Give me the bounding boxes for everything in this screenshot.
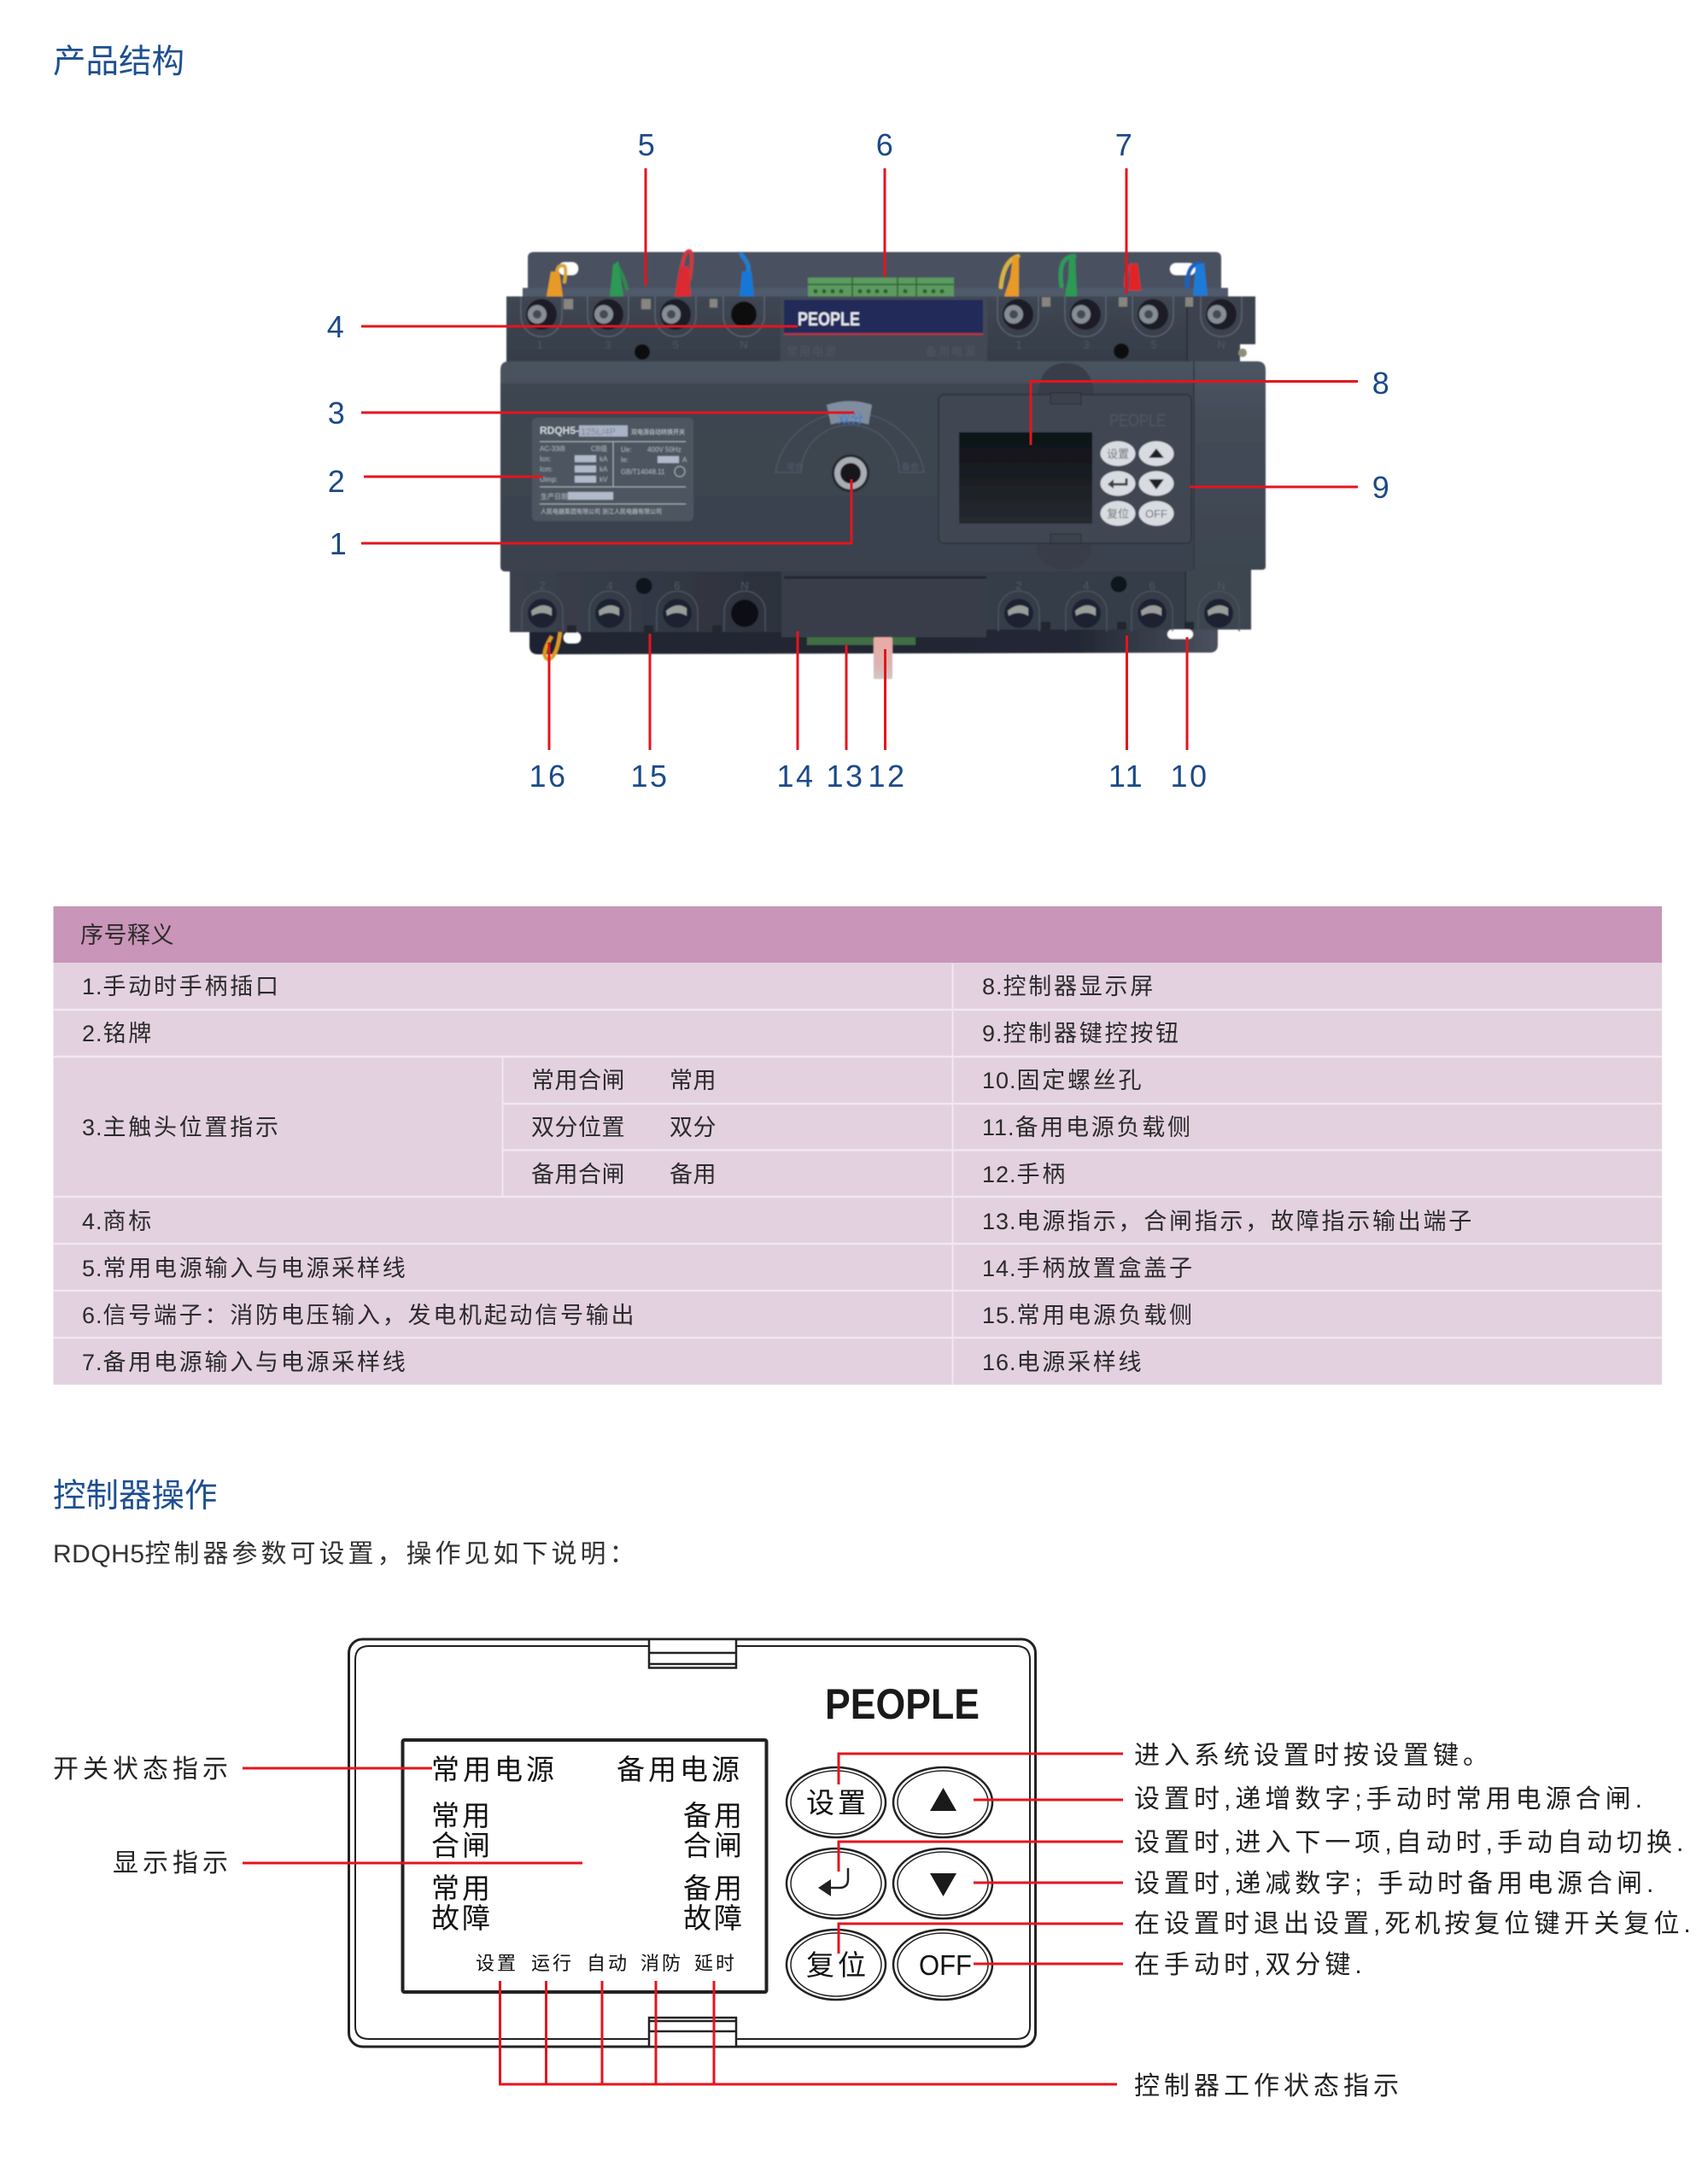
controller domes — [1036, 363, 1094, 570]
table body — [53, 963, 1662, 1385]
top terminal labels: 5 — [672, 338, 679, 351]
callout numbers: 3 — [328, 395, 347, 431]
left column: 3.主触头位置指示 — [82, 1115, 281, 1140]
bottom terminal labels: 6 — [674, 579, 681, 592]
button labels and icons: 设置 — [806, 1787, 869, 1819]
right column: 13.电源指示，合闸指示，故障指示输出端子 — [982, 1209, 1474, 1234]
nameplate: RDQH5- — [540, 425, 579, 437]
top terminal block centre — [781, 296, 987, 365]
top mounting plate — [528, 252, 1221, 296]
controller diagram — [348, 1639, 1035, 2047]
left column: 双分位置 — [531, 1115, 625, 1140]
nameplate: AC-33iB — [540, 445, 565, 453]
bottom terminal labels: 4 — [606, 579, 613, 592]
top terminal labels: 3 — [605, 338, 611, 351]
status labels: 设置 — [476, 1953, 518, 1974]
status labels: 消防 — [640, 1953, 683, 1974]
right annotations: 进入系统设置时按设置键。 — [1134, 1742, 1493, 1770]
position indicator arc: 常合 — [787, 461, 804, 472]
nameplate: Icn: — [540, 455, 551, 463]
right side module — [1192, 361, 1266, 570]
display labels: 合闸 — [431, 1830, 493, 1861]
display labels: 常用电源 — [431, 1754, 558, 1785]
nameplate: A — [682, 456, 687, 464]
holes in top block — [635, 343, 1129, 360]
bottom wire — [545, 632, 560, 659]
green signal terminals — [808, 278, 954, 296]
nameplate: kA — [600, 455, 608, 463]
mounting holes — [559, 262, 1196, 643]
product photo: switch device — [500, 251, 1266, 679]
top terminal block N — [1187, 296, 1255, 365]
callout numbers: 2 — [328, 464, 347, 499]
top terminals — [521, 296, 1242, 337]
top terminal labels: N — [1217, 338, 1225, 351]
display labels: 故障 — [431, 1902, 493, 1934]
left column: 5.常用电源输入与电源采样线 — [82, 1256, 408, 1281]
top terminal labels: 1 — [536, 338, 543, 351]
controller outline — [348, 1639, 1035, 2047]
wire sleeves top — [547, 256, 1208, 296]
left column: 1.手动时手柄插口 — [82, 974, 281, 999]
logo PEOPLE: PEOPLE — [825, 1680, 980, 1728]
top terminal block right — [987, 296, 1187, 365]
small contacts — [564, 297, 1193, 309]
lid edge — [784, 576, 986, 579]
holes in bottom block — [635, 576, 1127, 595]
callout numbers: 14 — [776, 759, 816, 794]
right annotations: 设置时,递减数字; 手动时备用电源合闸. — [1134, 1870, 1658, 1898]
right annotations: 设置时,进入下一项,自动时,手动自动切换. — [1134, 1829, 1688, 1857]
left column: 7.备用电源输入与电源采样线 — [82, 1350, 408, 1375]
left column: 常用合闸 — [531, 1068, 625, 1093]
button labels and icons: OFF — [919, 1949, 972, 1981]
nameplate: 双电源自动转换开关 — [631, 428, 685, 436]
right column: 12.手柄 — [982, 1162, 1068, 1187]
callout numbers: 5 — [638, 127, 657, 162]
right annotations: 控制器工作状态指示 — [1134, 2072, 1403, 2100]
callout numbers: 16 — [529, 759, 568, 794]
callout numbers: 7 — [1115, 127, 1134, 162]
nameplate: 125L/4P — [581, 427, 616, 437]
display labels: 常用 — [431, 1800, 493, 1831]
top terminal labels: 1 — [1015, 338, 1022, 351]
right column: 15.常用电源负载侧 — [982, 1303, 1195, 1328]
block divider bottom — [1184, 571, 1186, 628]
handle storage lid — [781, 567, 986, 637]
bottom terminal block left — [510, 567, 781, 632]
handle — [874, 637, 892, 679]
display labels — [431, 1754, 745, 1934]
callout numbers: 15 — [630, 759, 670, 794]
bottom terminal labels: 2 — [1015, 579, 1022, 592]
bottom terminal labels: N — [740, 579, 749, 592]
callout numbers: 13 — [826, 759, 865, 794]
nameplate: 生产日期 — [541, 492, 568, 501]
top terminal block left — [506, 296, 781, 365]
table: 序号释义 — [53, 906, 1662, 1385]
display labels: 故障 — [683, 1902, 745, 1934]
controller screen — [959, 432, 1092, 524]
callout numbers: 4 — [327, 309, 346, 344]
right column: 10.固定螺丝孔 — [982, 1068, 1144, 1093]
top clip — [649, 1639, 736, 1667]
display labels: 备用 — [683, 1800, 745, 1831]
bottom terminal labels: N — [1217, 579, 1225, 592]
left column: 常用 — [670, 1068, 717, 1093]
position indicator arc: 双分 — [838, 412, 863, 426]
display labels: 备用电源 — [617, 1754, 743, 1785]
bottom terminal labels: 6 — [1149, 579, 1155, 592]
status labels — [476, 1953, 737, 1974]
callout numbers — [327, 127, 1391, 794]
display labels: 备用 — [683, 1872, 745, 1904]
bottom terminal block N — [1185, 567, 1251, 630]
manual handle socket — [832, 454, 869, 492]
nameplate — [532, 418, 693, 521]
position indicator arc: 备合 — [902, 461, 919, 472]
side screw — [1238, 349, 1247, 357]
nameplate: Uimp: — [540, 476, 558, 483]
right annotations: 在手动时,双分键. — [1134, 1951, 1366, 1979]
callout numbers: 1 — [330, 526, 348, 561]
status labels: 自动 — [587, 1953, 629, 1974]
right annotations: 设置时,递增数字;手动时常用电源合闸. — [1134, 1785, 1647, 1813]
bottom terminal labels: 2 — [539, 579, 546, 592]
position indicator arc — [775, 401, 924, 472]
bottom terminal labels: 4 — [1083, 579, 1090, 592]
brand label PEOPLE — [784, 300, 983, 335]
top plate ledge — [523, 288, 1228, 297]
bottom terminal labels — [539, 579, 1225, 592]
block divider — [1186, 296, 1188, 361]
controller buttons: OFF — [1145, 507, 1167, 520]
right annotations: 在设置时退出设置,死机按复位键开关复位. — [1134, 1910, 1695, 1938]
top terminal labels — [536, 338, 1225, 351]
bottom clip — [649, 2018, 736, 2047]
top terminal labels: 3 — [1083, 338, 1090, 351]
left annotation: 开关状态指示: 开关状态指示 — [53, 1755, 232, 1784]
controller buttons — [1100, 441, 1173, 526]
left column: 备用 — [670, 1162, 717, 1187]
left column: 备用合闸 — [531, 1162, 625, 1187]
status labels: 运行 — [531, 1953, 574, 1974]
left column: 2.铭牌 — [82, 1021, 154, 1046]
nameplate: 400V 50Hz — [647, 446, 681, 454]
top terminal labels: N — [740, 338, 748, 351]
callout numbers: 12 — [868, 759, 907, 794]
callout numbers: 8 — [1372, 366, 1391, 401]
left column: 双分 — [670, 1115, 717, 1140]
nameplate: GB/T14048.11 — [621, 468, 665, 476]
controller buttons: 设置 — [1107, 448, 1129, 460]
nameplate: CB级 — [591, 444, 607, 453]
button labels and icons — [806, 1787, 972, 1981]
nameplate: kV — [600, 476, 608, 483]
table grid — [53, 964, 1662, 1385]
bottom terminal block right — [986, 567, 1185, 630]
callout numbers: 9 — [1372, 470, 1391, 505]
right column: 11.备用电源负载侧 — [982, 1115, 1193, 1140]
controller buttons: 复位 — [1107, 507, 1129, 520]
nameplate: kA — [600, 466, 608, 473]
callout numbers: 6 — [876, 127, 895, 162]
display labels: 常用 — [431, 1872, 493, 1904]
left column: 6.信号端子：消防电压输入，发电机起动信号输出 — [82, 1303, 636, 1328]
bottom terminals — [522, 591, 1239, 631]
embossed centre text: 备用电源 — [926, 345, 977, 358]
module divider — [1193, 361, 1195, 570]
controller callout lines — [243, 1754, 1123, 2084]
callout numbers: 10 — [1170, 759, 1209, 794]
display labels: 合闸 — [683, 1830, 745, 1861]
nameplate: 人民电器集团有限公司 浙江人民电器有限公司 — [541, 507, 662, 515]
embossed PEOPLE: PEOPLE — [1109, 412, 1166, 431]
table header text: 序号释义 — [80, 923, 174, 948]
callout numbers: 11 — [1108, 759, 1144, 794]
left column — [82, 974, 717, 1375]
callout lines — [361, 168, 1358, 750]
embossed centre text — [787, 345, 977, 358]
wires top — [557, 251, 1200, 289]
right column — [982, 974, 1474, 1375]
studs — [567, 622, 1194, 633]
main body — [500, 361, 1194, 571]
right column: 16.电源采样线 — [982, 1350, 1144, 1375]
controller panel — [939, 395, 1191, 543]
panel clips — [1050, 393, 1081, 543]
bottom green terminals — [807, 636, 915, 645]
left column: 4.商标 — [82, 1209, 154, 1234]
heading: 产品结构: 产品结构 — [53, 44, 184, 80]
nameplate: Ie: — [621, 456, 629, 464]
top terminal labels: 5 — [1150, 338, 1157, 351]
intro text: RDQH5控制器参数可设置，操作见如下说明： — [53, 1540, 639, 1568]
display window — [403, 1740, 767, 1992]
status labels: 延时 — [694, 1953, 737, 1974]
right column: 14.手柄放置盒盖子 — [982, 1256, 1195, 1281]
left annotation: 显示指示: 显示指示 — [113, 1849, 232, 1878]
bottom mounting plate — [529, 628, 1218, 654]
right column: 8.控制器显示屏 — [982, 974, 1155, 999]
nameplate: Ue: — [621, 446, 631, 454]
button labels and icons: 复位 — [806, 1949, 869, 1981]
embossed centre text: 常用电源 — [787, 345, 838, 358]
brand label PEOPLE: PEOPLE — [798, 308, 860, 330]
right annotations — [1134, 1742, 1695, 2100]
heading: 控制器操作: 控制器操作 — [53, 1478, 218, 1515]
table header — [53, 906, 1662, 963]
nameplate: Icm: — [540, 466, 553, 473]
right column: 9.控制器键控按钮 — [982, 1021, 1181, 1046]
button rings — [787, 1767, 992, 2000]
